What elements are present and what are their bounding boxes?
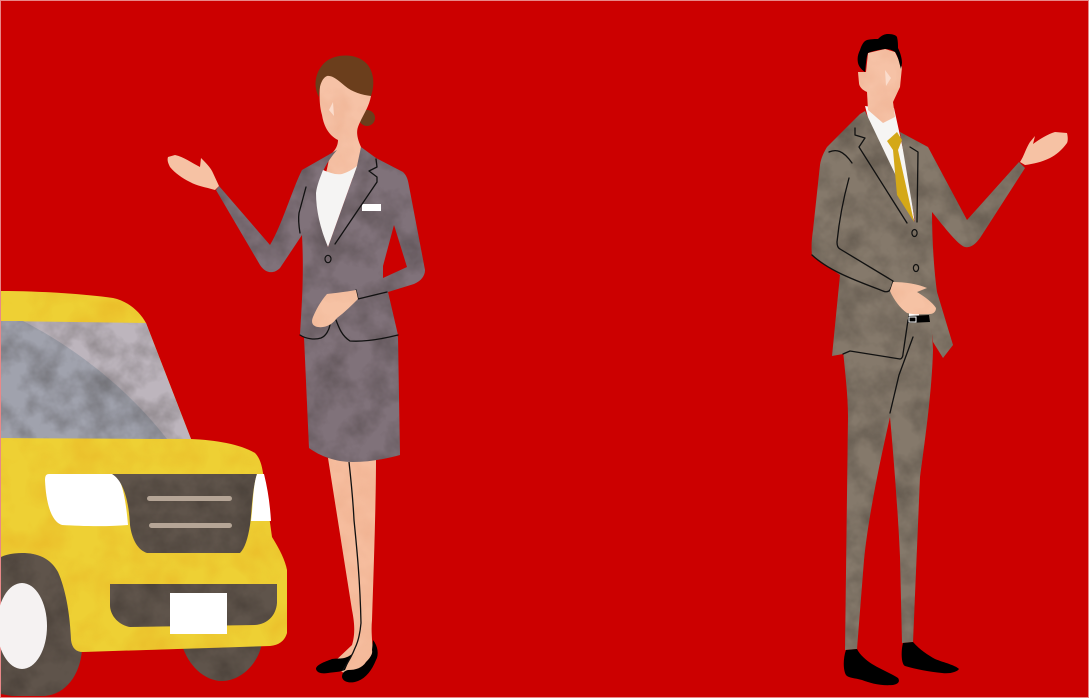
woman: hair bun bbox=[359, 110, 375, 126]
man: raised hand bbox=[1020, 132, 1068, 165]
man bbox=[812, 34, 1068, 685]
woman: button bbox=[325, 255, 331, 263]
man: hair bbox=[858, 34, 902, 72]
woman: name badge bbox=[362, 204, 381, 211]
man: buttons bbox=[912, 230, 919, 272]
car: windshield bbox=[1, 321, 191, 439]
car bbox=[0, 291, 287, 696]
woman: blouse bbox=[316, 166, 357, 247]
man: jacket lines bbox=[812, 128, 918, 413]
man: waist hand bbox=[890, 282, 936, 314]
car: right front wheel bbox=[182, 643, 262, 681]
man: jacket and sleeve bbox=[812, 111, 1025, 359]
woman: skirt bbox=[304, 312, 400, 462]
man: shirt and belt bbox=[908, 311, 930, 323]
man: trousers bbox=[841, 316, 933, 650]
car: grille bbox=[112, 474, 257, 553]
car: left front wheel bbox=[0, 549, 82, 696]
woman: nose highlight bbox=[329, 102, 334, 116]
woman: jacket lines bbox=[299, 159, 398, 341]
car: license plate bbox=[170, 593, 227, 634]
woman: neck and face bbox=[320, 68, 371, 182]
woman: waist hand bbox=[312, 290, 358, 327]
car: left headlight bbox=[45, 474, 128, 526]
car: lower intake bbox=[110, 584, 277, 627]
car: yellow body bbox=[1, 291, 287, 652]
man: left shoe bbox=[844, 649, 899, 685]
woman: front shoe bbox=[342, 640, 378, 682]
woman bbox=[168, 55, 425, 682]
woman: hair bbox=[316, 55, 373, 97]
woman: raised hand bbox=[168, 155, 219, 190]
man: shirt bbox=[865, 106, 915, 225]
man: right shoe bbox=[902, 642, 959, 673]
woman: rear shoe bbox=[316, 654, 352, 673]
car: windshield reflection bbox=[1, 321, 167, 439]
woman: jacket and sleeves bbox=[216, 147, 425, 341]
man: tie bbox=[887, 132, 914, 222]
car: right headlight bbox=[251, 474, 271, 521]
man: neck and face bbox=[858, 49, 902, 123]
man: nose highlight bbox=[885, 70, 891, 86]
woman: gap between torso and arm bbox=[383, 225, 407, 278]
woman: legs bbox=[328, 458, 376, 674]
woman: leg line bbox=[343, 462, 361, 670]
car: grille bars bbox=[147, 496, 232, 528]
